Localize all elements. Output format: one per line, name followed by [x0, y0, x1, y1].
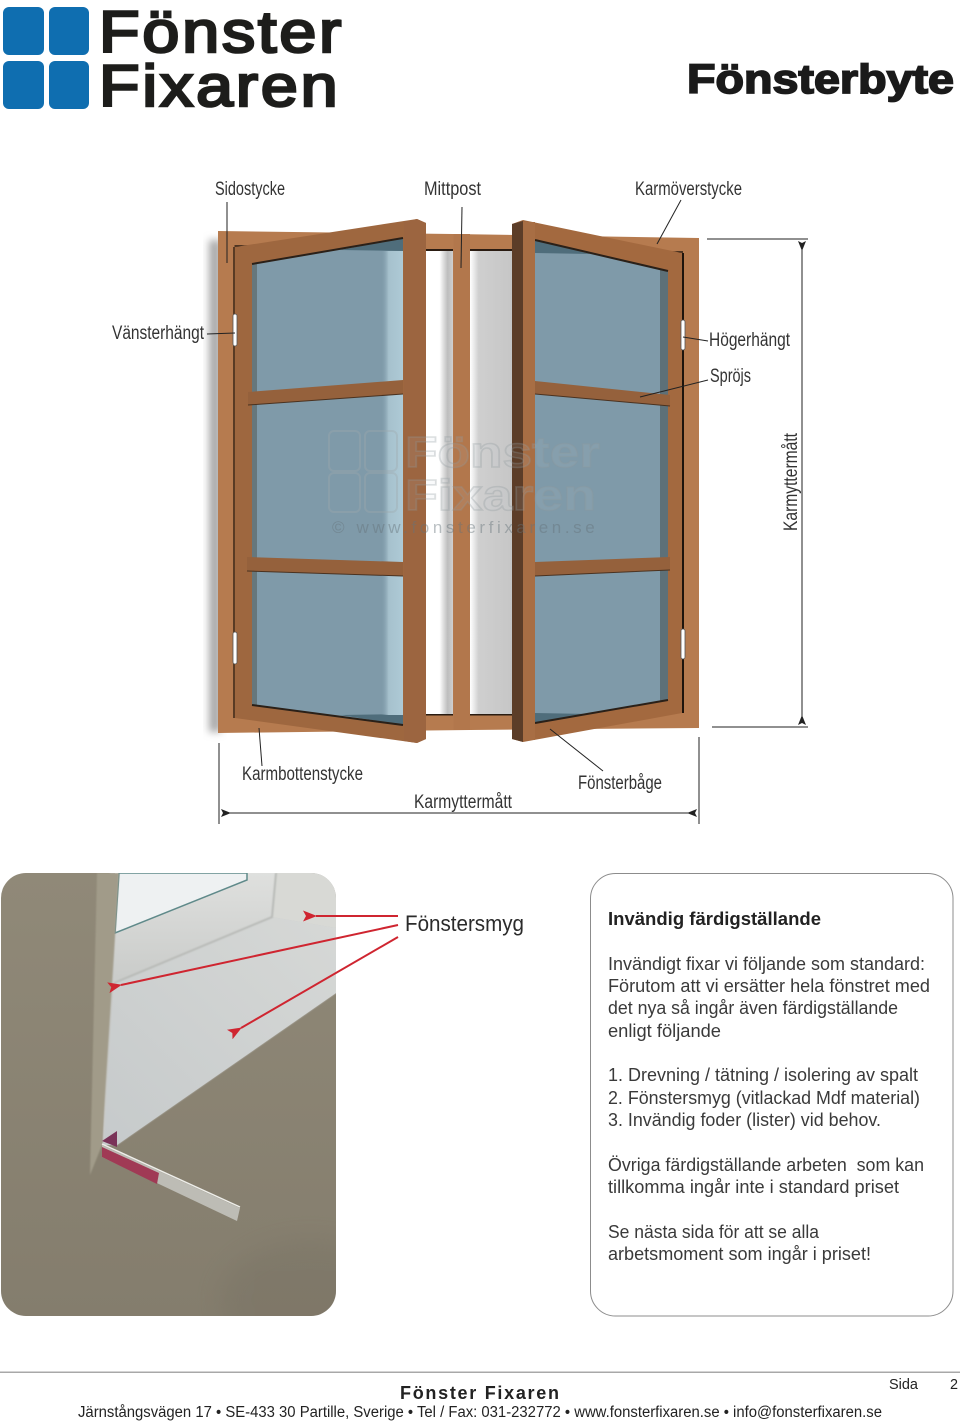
right reveal: [272, 873, 336, 928]
logo wordmark: [99, 1, 344, 119]
right sash outer dark edge: [682, 253, 684, 713]
vertical dimension arrow: [707, 239, 808, 727]
numbered list: 1. Drevning / tätning / isolering av spalt: [608, 1065, 918, 1085]
label: Spröjs: Spröjs: [710, 366, 751, 387]
other work note: [608, 1155, 924, 1197]
intro text: enligt följande: [608, 1021, 721, 1041]
opening dark edges: [426, 249, 513, 716]
leader lines: [207, 200, 708, 771]
logo: Fönster Fixaren: [3, 1, 344, 119]
panel: Invändig färdigställande: [590, 874, 953, 1316]
left glass: [252, 238, 403, 725]
left frame opening corner: [234, 245, 252, 247]
right glass side shadow: [660, 270, 668, 701]
page title: Fönsterbyte: [687, 56, 954, 102]
left glass top reveal: [340, 238, 403, 251]
left sash rails: [247, 380, 403, 576]
panel heading: Invändig färdigställande: [608, 909, 821, 929]
numbered list: 3. Invändig foder (lister) vid behov.: [608, 1110, 881, 1130]
window frame surround: [115, 873, 276, 942]
label: Karmyttermått vertical: Karmyttermått: [781, 432, 802, 531]
next page note: arbetsmoment som ingår i priset!: [608, 1244, 871, 1264]
watermark panes: [329, 431, 397, 512]
ruler red part: [102, 1147, 159, 1184]
left sash wood: [235, 219, 426, 743]
watermark wordmark: Fixaren: [405, 471, 596, 520]
other work note: Övriga färdigställande arbeten som kan: [608, 1155, 924, 1175]
sill: [104, 917, 336, 1145]
ruler top edge: [102, 1144, 240, 1207]
logo wordmark: Fixaren: [99, 55, 340, 119]
watermark wordmark: Fönster: [405, 428, 600, 477]
next page note: Se nästa sida för att se alla: [608, 1222, 820, 1242]
right sash wood: [512, 220, 682, 742]
intro text: Invändigt fixar vi följande som standard:: [608, 954, 925, 974]
intro text: [608, 954, 930, 1041]
icon: four blue window panes: [3, 7, 89, 109]
wall corner shade: [312, 1292, 336, 1316]
watermark url: © www.fonsterfixaren.se: [332, 518, 598, 537]
label: Karmöverstycke: Karmöverstycke: [635, 179, 742, 200]
horizontal dimension arrow: [219, 737, 699, 824]
left glass bottom reveal: [340, 714, 403, 725]
footer company name: Fönster Fixaren: [400, 1383, 559, 1403]
right opening: [470, 250, 513, 715]
left rail edges: [247, 394, 403, 576]
hinges: [233, 314, 685, 664]
watermark: [329, 428, 600, 537]
watermark wordmark: [405, 428, 600, 520]
label: Mittpost: Mittpost: [424, 179, 482, 200]
right glass top reveal: [535, 240, 590, 254]
next page note: [608, 1222, 871, 1264]
left opening: [426, 250, 453, 715]
diagram labels: [112, 179, 802, 813]
left glass inner shadow: [252, 262, 257, 705]
callout label: Fönstersmyg: Fönstersmyg: [405, 911, 524, 936]
pier face: [90, 873, 119, 1175]
footer: [0, 1372, 960, 1421]
page number: Sida: [889, 1376, 919, 1393]
panel outline: [590, 874, 953, 1316]
outer window frame: [218, 231, 699, 733]
left sash right stile: [404, 219, 426, 743]
label: Sidostycke: Sidostycke: [215, 179, 285, 200]
ruler purple end: [102, 1131, 117, 1147]
left sash top and bottom edge: [252, 238, 403, 725]
right rail edges: [535, 394, 670, 576]
left glass highlight: [381, 251, 403, 715]
label: Karmbottenstycke: Karmbottenstycke: [242, 764, 363, 785]
right sash light stile side: [523, 222, 535, 740]
right sash rails: [535, 381, 670, 576]
label: Högerhängt: Högerhängt: [709, 330, 791, 351]
page number: 2: [950, 1376, 958, 1393]
right frame opening corner: [660, 251, 683, 253]
right glass bottom reveal: [535, 713, 590, 723]
left sash: [234, 219, 426, 743]
page number: [889, 1376, 958, 1393]
right sash dark stile side: [512, 221, 523, 742]
wall: [1, 873, 336, 1316]
window diagram: [112, 179, 808, 824]
intro text: Förutom att vi ersätter hela fönstret med: [608, 976, 930, 996]
centre post: [454, 234, 470, 730]
numbered list: 2. Fönstersmyg (vitlackad Mdf material): [608, 1088, 920, 1108]
label: Karmyttermått horizontal: Karmyttermått: [414, 792, 513, 813]
recess: [102, 873, 336, 1145]
callout arrows: Fönstersmyg: [121, 916, 398, 1028]
glass: [115, 873, 247, 933]
left sash inner dark edge: [233, 247, 235, 718]
right glass: [535, 240, 668, 723]
numbered list: [608, 1065, 920, 1130]
other work note: tillkomma ingår inte i standard priset: [608, 1177, 899, 1197]
sill back edge: [114, 873, 276, 983]
right sash top and bottom edge: [535, 240, 668, 723]
right sash: [512, 220, 683, 742]
logo wordmark: Fönster: [99, 1, 344, 65]
frame shadow: [209, 240, 221, 732]
photo: window reveal: [1, 873, 336, 1316]
label: Vänsterhängt: Vänsterhängt: [112, 323, 205, 344]
intro text: det nya så ingår även färdigställande: [608, 998, 898, 1018]
label: Fönsterbåge: Fönsterbåge: [578, 773, 662, 794]
ruler silver part: [102, 1145, 240, 1221]
footer address: Järnstångsvägen 17 • SE-433 30 Partille, Sverige • Tel / Fax: 031-232772 • www.fonsterfixaren.se • info@fonsterfixaren.se: [78, 1404, 882, 1421]
